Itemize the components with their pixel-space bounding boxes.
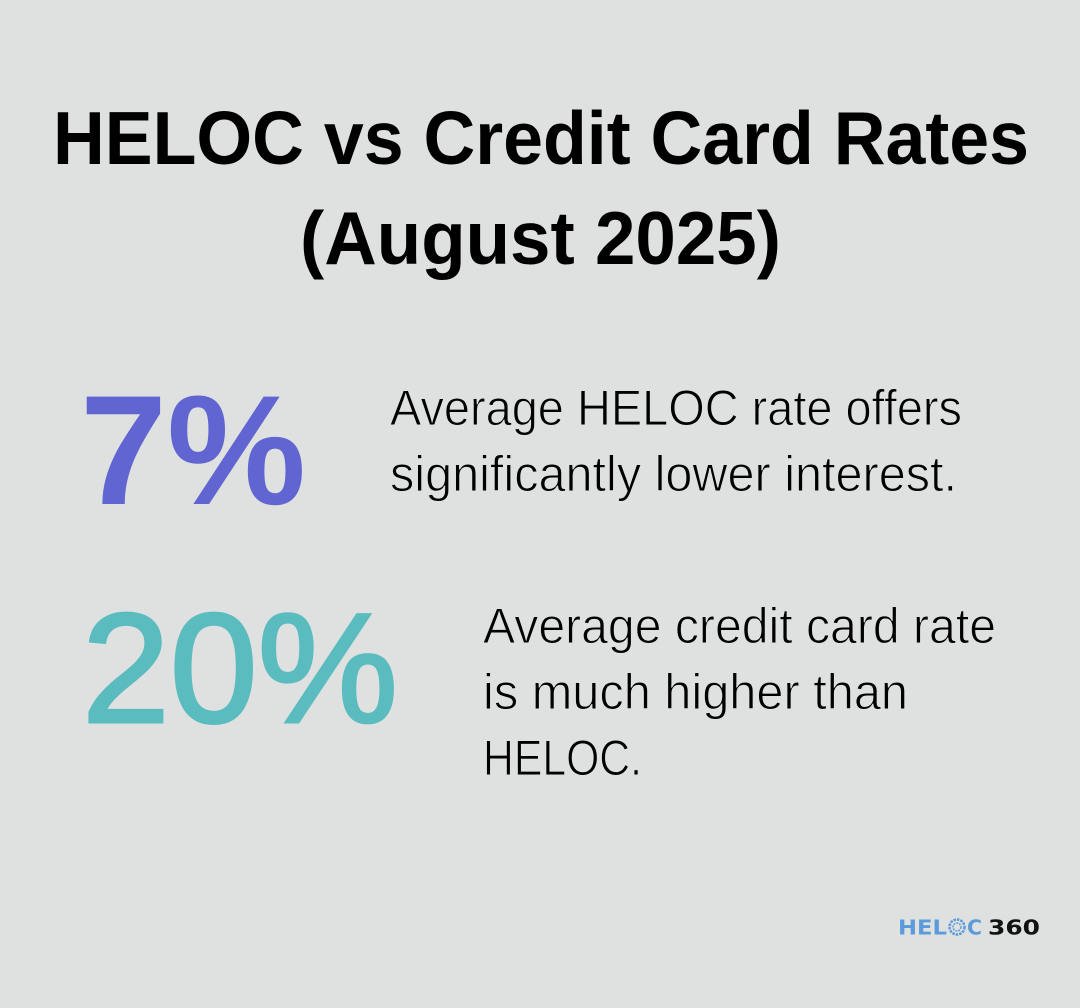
text: HELOC rate description <box>390 380 962 502</box>
icon: spiral O in logo <box>950 920 964 934</box>
text: HELOC rate description: significantly lower interest. <box>390 446 957 502</box>
title: (August 2025) <box>300 196 781 280</box>
text: credit card rate description: HELOC. <box>483 730 642 786</box>
text: HELOC rate description: Average HELOC rate offers <box>390 380 962 436</box>
logo: HELOC360: HEL <box>898 916 947 940</box>
logo: HELOC360: C <box>967 916 982 940</box>
stat: 7%: 7% <box>80 364 306 538</box>
text: credit card rate description <box>483 598 996 786</box>
logo: HELOC360: 360 <box>988 916 1040 940</box>
stat: 20%: 20% <box>82 582 398 756</box>
text: credit card rate description: is much higher than <box>483 664 908 720</box>
title <box>53 96 1029 280</box>
title: HELOC vs Credit Card Rates <box>53 96 1029 180</box>
logo: HELOC360 <box>898 916 1040 940</box>
text: credit card rate description: Average credit card rate <box>483 598 996 654</box>
